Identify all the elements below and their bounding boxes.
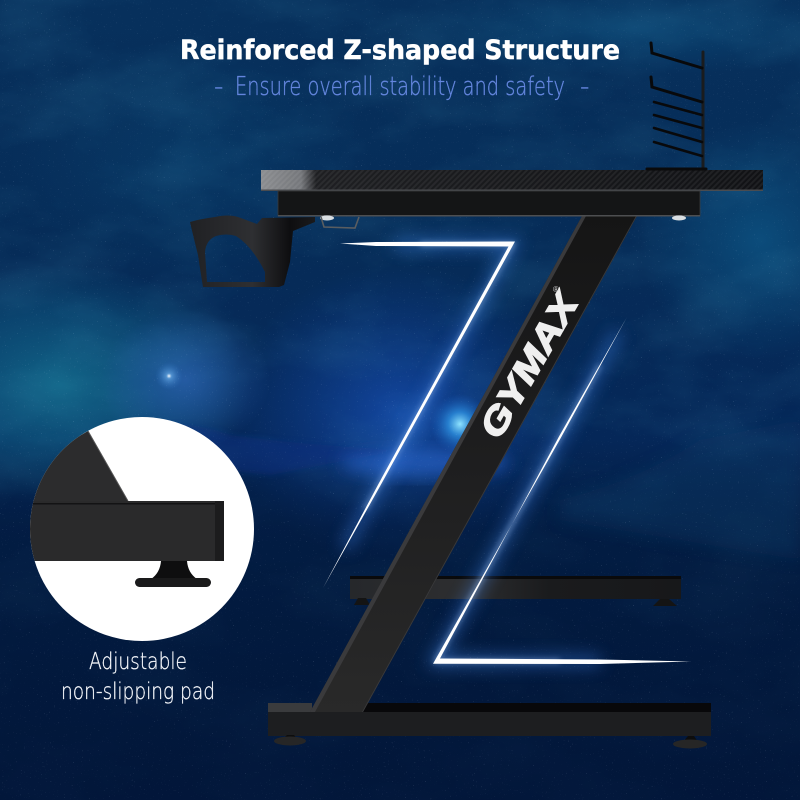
front base bar (268, 703, 711, 748)
bracket (321, 217, 359, 228)
Z-shaped leg (310, 216, 637, 712)
glowing Z light outline (323, 242, 691, 664)
cup holder (190, 216, 315, 287)
subtitle: - (580, 72, 589, 102)
title: Reinforced Z-shaped Structure (180, 35, 620, 66)
caption: adjustable non-slipping pad: non-slipping pad (61, 679, 215, 705)
subtitle: Ensure overall stability and safety (235, 72, 565, 102)
caption: adjustable non-slipping pad: Adjustable (89, 649, 187, 675)
rear base bar of desk (350, 576, 681, 606)
subtitle: - (214, 72, 223, 102)
headset and controller rack (647, 43, 706, 170)
rear feet (354, 598, 677, 606)
front right foot (673, 736, 707, 748)
front left foot (274, 735, 306, 746)
GYMAX logo: GYMAX (472, 284, 588, 445)
caption: adjustable non-slipping pad (61, 649, 215, 705)
under-desk frame (278, 191, 700, 216)
desktop with carbon fibre top (261, 170, 763, 228)
registered mark: ® (553, 285, 559, 294)
washers (320, 216, 686, 220)
detail circle: adjustable foot pad (20, 417, 254, 641)
